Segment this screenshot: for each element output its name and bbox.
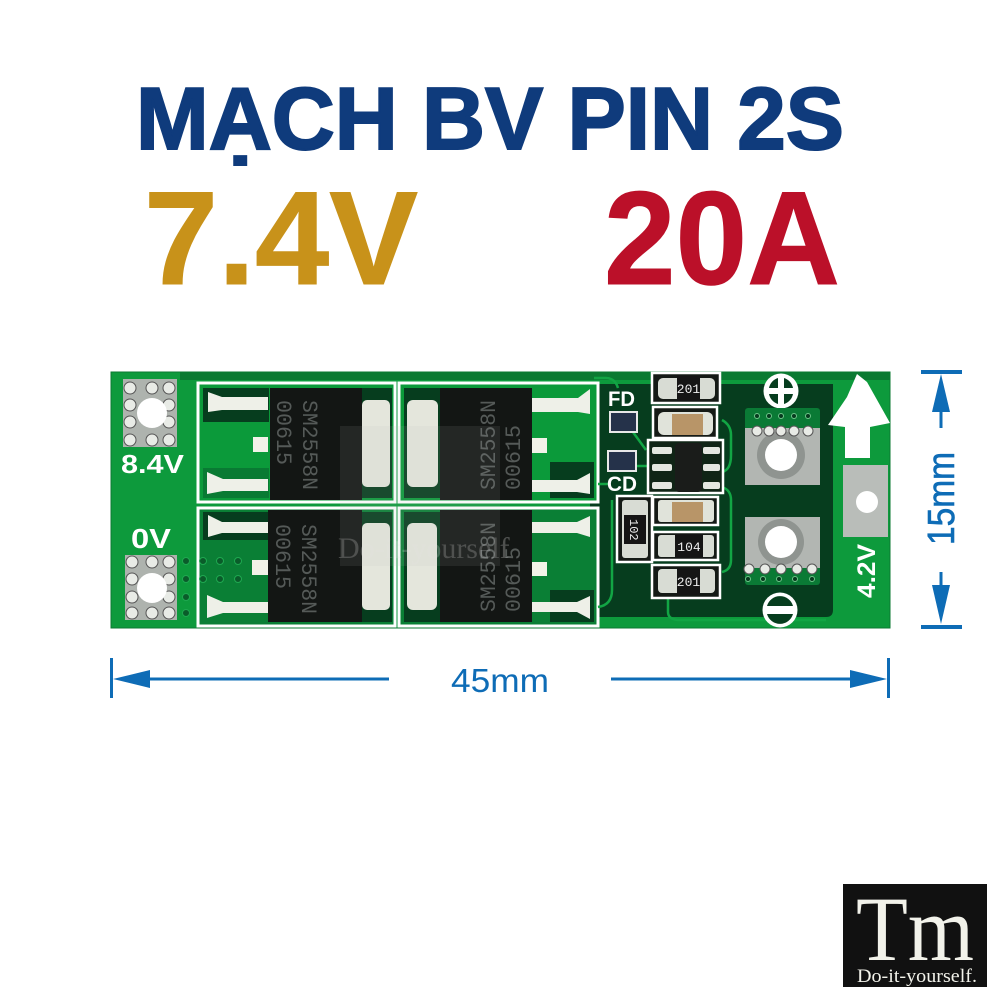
resistor 201 bottom: 201 [677, 575, 700, 590]
MOSFET top left [198, 383, 395, 502]
voltage label: 7.4V [144, 165, 418, 313]
watermark: Do-it-yourself [338, 532, 510, 565]
MOSFET top right: SM2558N [477, 400, 502, 490]
negative mark [762, 592, 798, 628]
left terminal 8.4V [123, 379, 177, 447]
capacitor bottom [653, 497, 718, 525]
label 0V: 0V [131, 523, 171, 554]
MOSFET bottom right: 00615 [502, 547, 527, 612]
MOSFET top right [399, 383, 598, 502]
MOSFET bottom left: 00615 [269, 524, 294, 589]
top edge strip [180, 372, 890, 380]
CD test pad [608, 451, 636, 471]
height dimension [921, 370, 963, 629]
label 4.2V: 4.2V [853, 544, 881, 598]
45mm label: 45mm [451, 662, 549, 699]
MOSFET bottom right: SM2558N [477, 522, 502, 612]
watermark [338, 426, 510, 566]
title: MẠCH BV PIN 2S [136, 69, 844, 168]
label CD: CD [607, 473, 637, 496]
resistor 104 [653, 532, 718, 560]
dark copper area [590, 384, 833, 617]
resistor 104: 104 [677, 540, 701, 555]
circuit board [111, 372, 890, 628]
positive mark [764, 374, 798, 408]
resistor 102 [617, 496, 652, 562]
green traces [594, 378, 826, 620]
MOSFET top left: SM2558N [296, 400, 321, 490]
control IC [648, 440, 723, 493]
resistor 102: 102 [626, 519, 640, 541]
logo: Tm [856, 878, 974, 980]
terminal 4.2V pad [843, 465, 888, 537]
board base [111, 372, 890, 628]
label FD: FD [608, 388, 635, 411]
logo: Do-it-yourself. [857, 966, 977, 987]
pad bottom [744, 517, 820, 585]
label 8.4V: 8.4V [121, 449, 185, 479]
resistor 201 bottom [652, 565, 720, 598]
resistor 201 top [652, 373, 720, 403]
current label: 20A [604, 165, 840, 313]
15mm label: 15mm [921, 452, 963, 545]
capacitor top [653, 407, 717, 438]
resistor 201 top: 201 [677, 382, 700, 397]
arrow marking [828, 374, 890, 458]
left terminal 0V [125, 555, 177, 620]
MOSFET top right: 00615 [502, 425, 527, 490]
MOSFET bottom left [182, 508, 395, 626]
pad top [745, 408, 820, 485]
FD test pad [610, 412, 637, 432]
width dimension [110, 658, 890, 699]
MOSFET bottom left: SM2558N [295, 524, 320, 614]
MOSFET bottom right [399, 508, 598, 626]
MOSFET top left: 00615 [270, 400, 295, 465]
